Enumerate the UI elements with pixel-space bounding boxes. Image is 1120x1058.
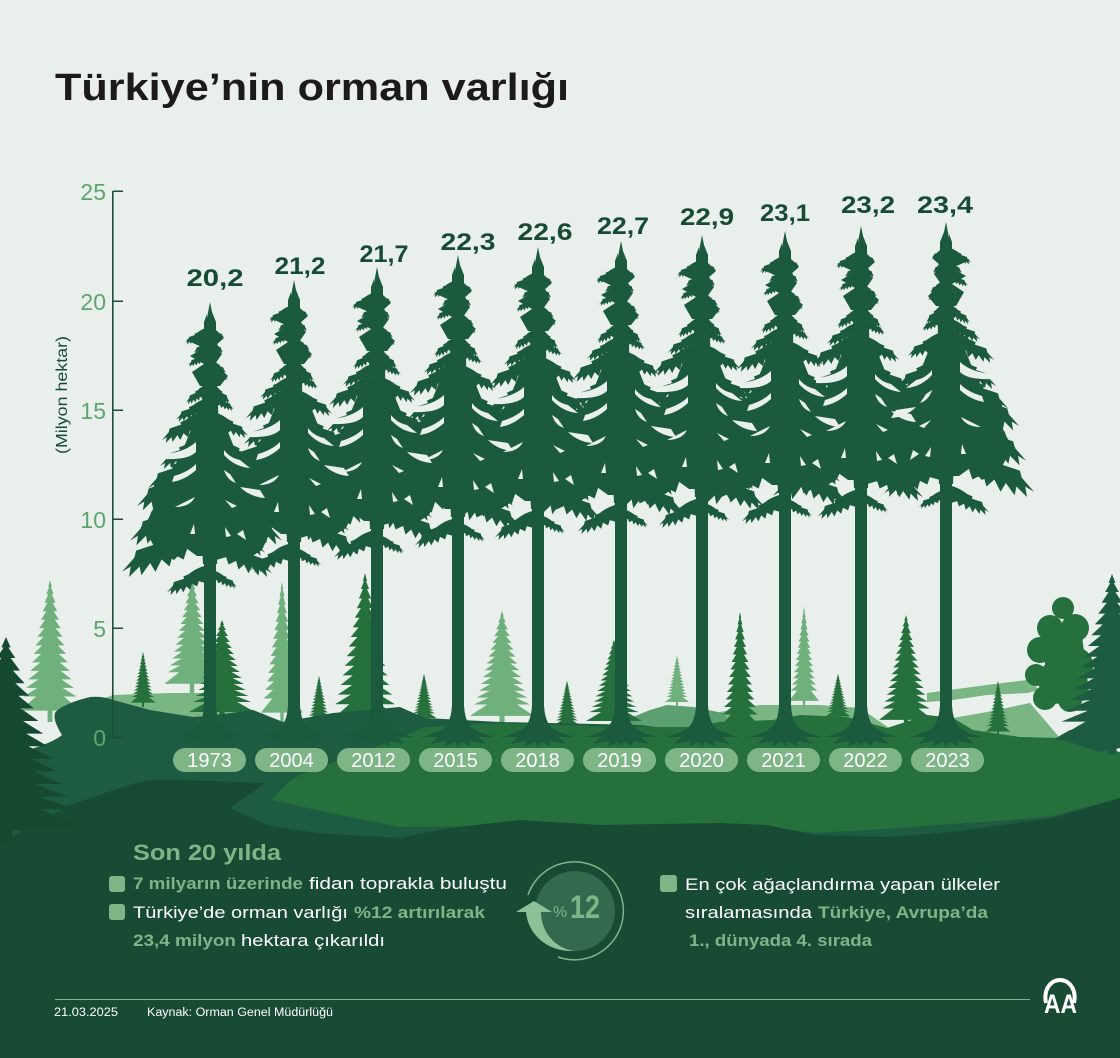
year pills: 1973 [187,750,232,772]
footer line [55,999,1030,1000]
y axis [80,179,123,751]
y axis: 5 [93,616,106,642]
tree 2021 [697,231,857,746]
year pills: 2018 [515,750,560,772]
value labels: 23,4 [917,192,974,219]
year pills: 2020 [679,750,724,772]
value labels: 21,2 [274,253,326,280]
tree 2015 [370,255,530,746]
heading: Son 20 yilda: Son 20 yılda [133,840,282,865]
ground: dark green foreground [0,780,1120,1058]
y axis: 25 [80,179,106,205]
tree 2020 [614,235,774,746]
left text block: fidan toprakla buluştu [309,874,507,893]
right text block [660,875,1000,950]
right text block: En çok ağaçlandırma yapan ülkeler [685,875,1000,894]
tree 2023 [874,222,1034,746]
y axis: 20 [80,289,106,315]
back light hills [100,680,1060,745]
percent circle icon [516,862,623,960]
right text block: Türkiye, Avrupa’da [818,903,989,922]
percent circle icon: % [553,904,567,921]
title: Türkiye’nin orman varlığı [55,67,569,109]
tree 1973 [122,302,282,746]
tree 2022 [773,226,933,746]
value labels: 22,3 [440,229,496,256]
icon: AA logo [1044,980,1077,1019]
y axis: 15 [80,398,106,424]
left foreground tree [0,637,84,847]
year pills: 2021 [761,750,806,772]
value labels: 21,7 [360,241,408,268]
value labels: 23,2 [841,192,895,219]
year pills: 2019 [597,750,642,772]
year pills [173,748,984,772]
left text block: 7 milyarın üzerinde [133,874,303,893]
right forest: large conifer [1054,574,1120,754]
year pills: 2015 [433,750,478,772]
y axis: 10 [80,507,106,533]
icon: AA logo: AA [1044,989,1077,1019]
percent circle icon: 12 [570,889,600,925]
year pills: 2004 [269,750,314,772]
small and medium green conifers [130,573,1010,737]
foliage gaps [165,362,991,540]
y axis: 0 [93,725,106,751]
value labels: 23,1 [760,200,810,227]
tall trees chart [122,222,1034,746]
tree 2018 [450,247,610,746]
footer date: 21.03.2025 [54,1007,118,1019]
left text block [109,874,507,950]
tree 2004 [206,280,366,746]
left text block: Türkiye’de orman varlığı [133,903,348,922]
value labels: 22,7 [597,213,649,240]
year pills: 2023 [925,750,970,772]
right forest: deciduous tree [1025,597,1093,712]
value labels: 22,6 [518,219,572,246]
year pills: 2012 [351,750,396,772]
background trees: light green [20,578,819,725]
ground: bright green field [272,715,1120,833]
left text block: 23,4 milyon [133,931,236,950]
axis label: (Milyon hektar) [54,336,71,454]
tree 2012 [289,267,449,746]
footer source: Kaynak: Orman Genel Müdürlüğü [147,1007,333,1019]
ground: mid green strip under field [780,785,1120,845]
right text block: 1., dünyada 4. sırada [689,931,873,950]
tree 2019 [533,241,693,746]
left text block: %12 artırılarak [354,903,486,922]
year pills: 2022 [843,750,888,772]
value labels: 22,9 [680,204,734,231]
value labels [186,192,974,292]
value labels: 20,2 [186,265,244,292]
ground: mid green hill [0,697,800,845]
right text block: sıralamasında [685,903,813,922]
left text block: hektara çıkarıldı [241,931,385,950]
